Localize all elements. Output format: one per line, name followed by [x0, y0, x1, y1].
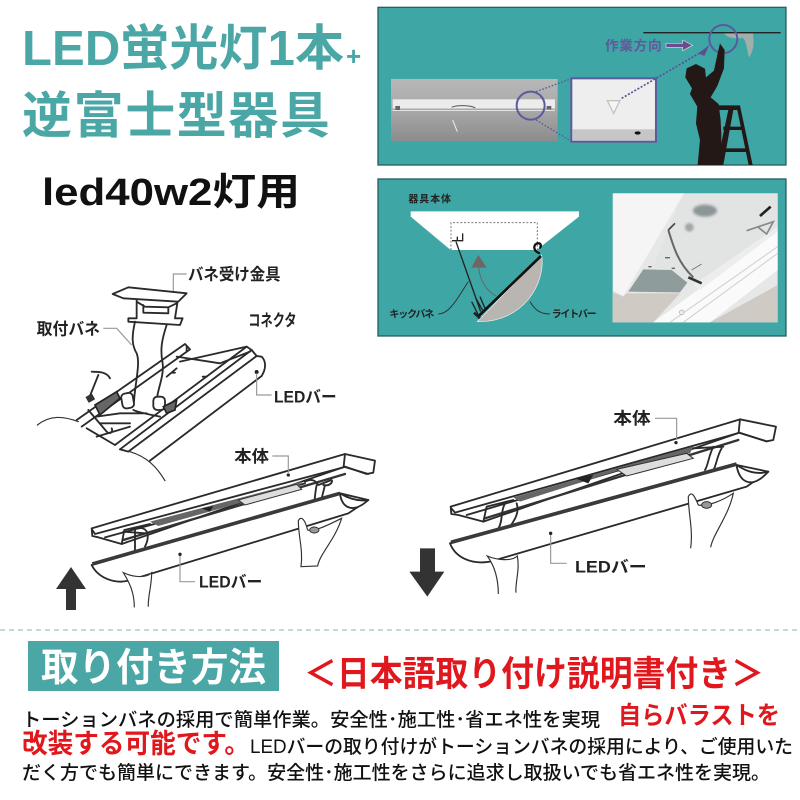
hands: [123, 518, 342, 607]
body text: LEDバーの取り付けがトーションバネの採用により、ご使用いた: [250, 736, 793, 758]
label: kick spring: キックバネ: [389, 309, 434, 321]
diagram: connector and spring detail: [37, 265, 337, 481]
label: kick spring: [389, 282, 468, 321]
body text: [22, 702, 793, 784]
magnifier circle: [517, 92, 545, 120]
silhouette: worker on ladder: [685, 43, 753, 165]
title: [22, 22, 361, 144]
body text: 自らバラストを: [618, 702, 780, 730]
label: body: 本体: [234, 447, 270, 466]
diagram: installing bar: [92, 447, 375, 607]
arrow: up: [56, 567, 86, 610]
label: light bar: ライトバー: [552, 309, 597, 321]
label: light bar: [530, 302, 597, 321]
diagram: removing bar: [409, 409, 776, 597]
label: body: [234, 447, 288, 474]
photo: fixture under ceiling: [391, 79, 558, 141]
label: mounting spring: [37, 321, 132, 345]
body text: トーションバネの採用で簡単作業。安全性･施工性･省エネ性を実現: [22, 709, 600, 731]
label: work direction: 作業方向: [605, 37, 662, 53]
red heading: Japanese manual included: ＜日本語取り付け説明書付き＞: [304, 655, 764, 694]
dashed divider: [0, 629, 800, 631]
label: body: 本体: [613, 409, 651, 428]
label: LED bar: LEDバー: [199, 573, 262, 591]
hand outline: [37, 417, 165, 481]
arrow: down: [409, 548, 444, 597]
title: 逆富士型器具: [22, 88, 330, 144]
LED bar and rails: [77, 344, 272, 461]
panel: work direction: [378, 7, 786, 165]
ceiling and fixture: [643, 25, 781, 57]
fixture body: [451, 419, 776, 528]
title: LED蛍光灯1本: [22, 22, 344, 76]
mounting springs: [133, 322, 167, 402]
photo: fixture interior: [613, 193, 778, 322]
spring bracket: [113, 287, 187, 325]
LED bar: [92, 493, 368, 582]
label: body: [613, 409, 677, 440]
subtitle: led40w2灯用: [42, 172, 300, 214]
label: spring bracket: [173, 265, 281, 293]
connector parts: [85, 372, 177, 433]
panel: kick spring diagram: [378, 179, 786, 336]
heading box: installation method: 取り付き方法: [41, 647, 266, 690]
label: spring bracket: バネ受け金具: [188, 265, 281, 284]
LED bar: [450, 464, 768, 563]
kick spring: [456, 242, 485, 318]
label: LED bar: LEDバー: [274, 388, 337, 406]
arrow: work direction: [666, 40, 693, 51]
label: mounting spring: 取付バネ: [37, 321, 100, 339]
title: +: [346, 41, 361, 71]
fixture cross-section: [411, 211, 579, 250]
label: LED bar: LEDバー: [575, 558, 647, 576]
label: fixture body: 器具本体: [408, 192, 451, 205]
inset: zoomed latch: [571, 78, 656, 142]
arrow: lift direction: [471, 255, 496, 296]
label: connector: コネクタ: [248, 312, 297, 330]
body text: 改装する可能です。: [22, 729, 250, 759]
light bar section: [477, 243, 542, 322]
fixture body: [92, 454, 375, 550]
body text: だく方でも簡単にできます。安全性･施工性をさらに追求し取扱いでも省エネ性を実現。: [22, 762, 770, 784]
hands: [487, 493, 733, 594]
